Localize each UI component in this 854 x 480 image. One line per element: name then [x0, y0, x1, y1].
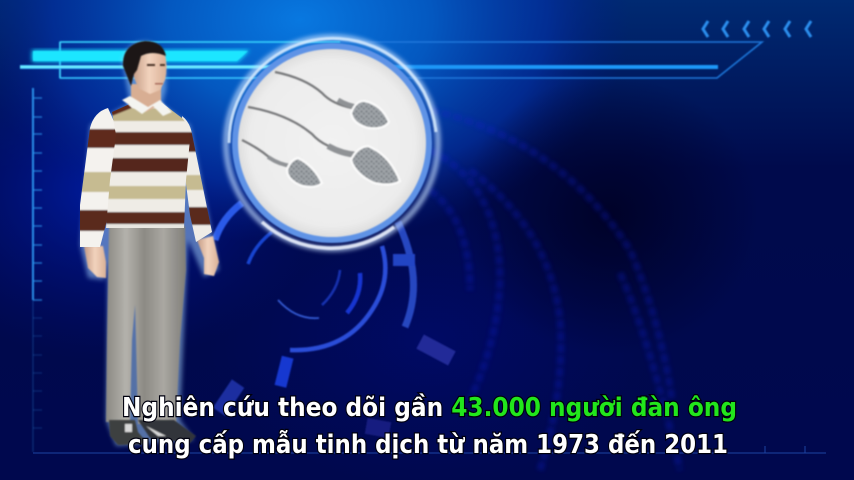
- sperm middle: [248, 107, 400, 185]
- caption line 2: cung cấp mẫu tinh dịch từ năm 1973 đến 2011: [128, 429, 728, 460]
- vertical ruler: [33, 88, 42, 452]
- sperm top: [275, 72, 389, 128]
- right hand: [197, 236, 219, 276]
- man figure: [70, 41, 220, 446]
- left hand: [84, 246, 106, 278]
- shoes: [109, 420, 196, 445]
- disc: [238, 49, 426, 237]
- right sleeve: [182, 116, 212, 242]
- legs: [106, 226, 186, 424]
- hair: [123, 41, 166, 86]
- cyan bar: [32, 50, 250, 62]
- face: [132, 49, 166, 94]
- outer ring: [226, 37, 438, 249]
- bottom baseline: [33, 446, 826, 453]
- torso stripes: [106, 103, 190, 228]
- caption: [122, 392, 737, 460]
- collar: [122, 96, 172, 116]
- sperm lower: [242, 140, 322, 187]
- concentric tech arcs: [213, 203, 456, 438]
- caption line 1: Nghiên cứu theo dõi gần 43.000 người đàn ông: [122, 392, 737, 423]
- wireframe rings: [430, 110, 680, 470]
- figure halo: [80, 41, 219, 446]
- left sleeve: [80, 108, 116, 247]
- top frame lines: [20, 42, 762, 78]
- neck: [131, 84, 161, 112]
- facial features: [147, 64, 165, 84]
- chevron row: [703, 21, 811, 37]
- sperm magnifier: [226, 37, 438, 249]
